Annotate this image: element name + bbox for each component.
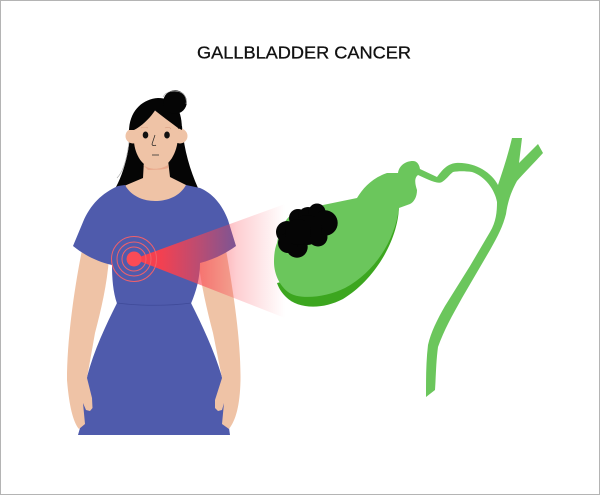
ears: [126, 128, 188, 144]
pain target rings: [112, 236, 156, 282]
hair back: [116, 126, 198, 188]
hair bun: [163, 90, 187, 114]
bodice and sleeves: [73, 185, 236, 304]
hair top: [129, 98, 182, 130]
tumor: [276, 204, 338, 258]
right arm: [198, 250, 241, 429]
neck: [124, 160, 188, 201]
title: GALLBLADDER CANCER: [197, 42, 411, 62]
gallbladder shadow side: [277, 205, 399, 307]
pain cone: [134, 204, 285, 318]
face details: [141, 127, 171, 155]
left arm: [67, 250, 109, 429]
skirt: [78, 303, 230, 435]
waist seam: [117, 303, 191, 305]
woman figure: [67, 90, 241, 435]
face: [134, 111, 178, 168]
gallbladder and duct: [274, 138, 543, 397]
neck shadow: [143, 165, 168, 170]
gallbladder organ: [274, 138, 543, 397]
